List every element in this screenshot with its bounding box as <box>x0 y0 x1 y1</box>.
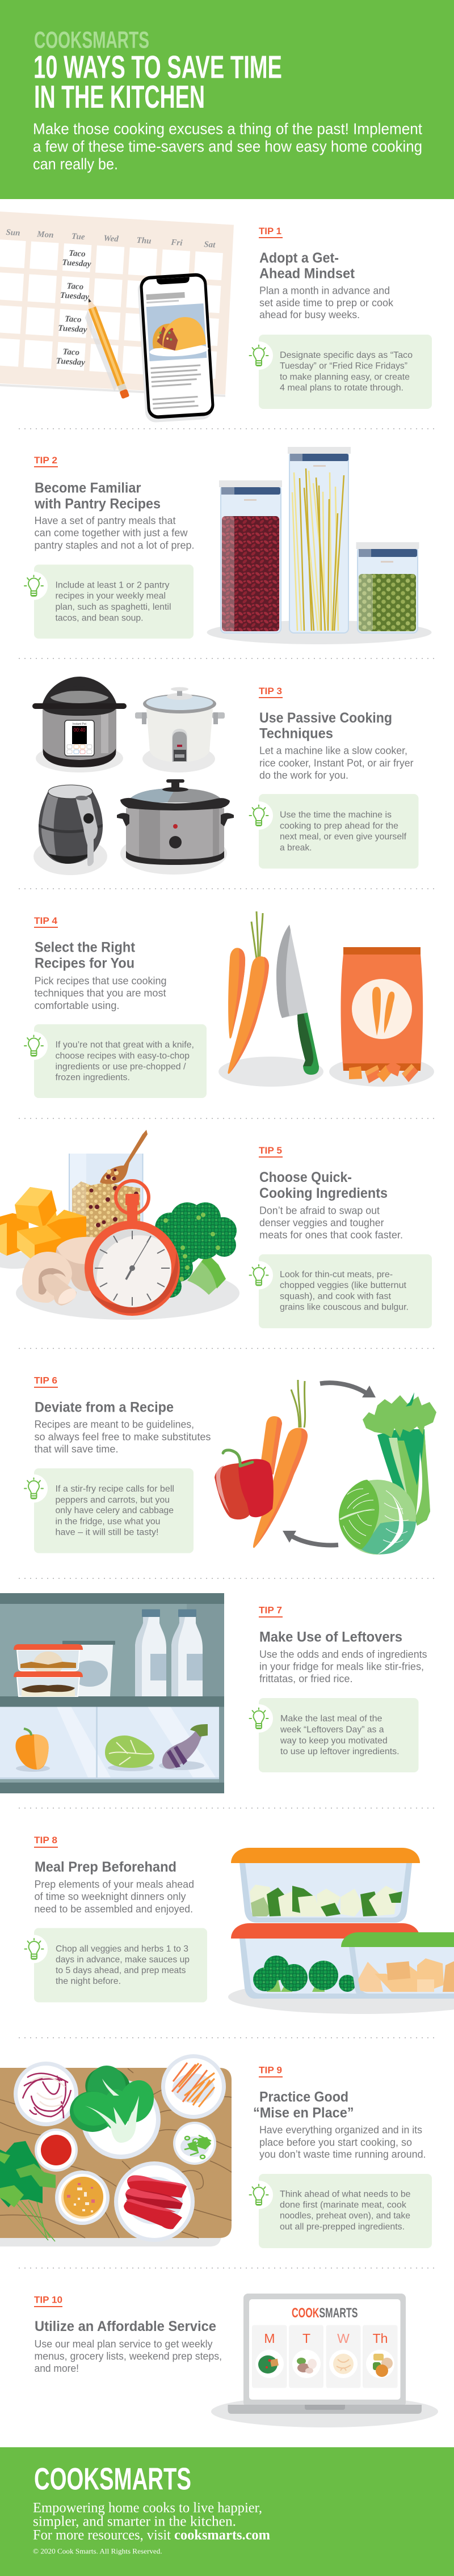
callout: recipes in your weekly meal <box>56 592 166 601</box>
illustration: calendar: Taco <box>65 314 82 324</box>
illustration: frozen carrot bag <box>329 947 434 1087</box>
body text: Don’t be afraid to swap out <box>259 1205 380 1216</box>
heading: Adopt a Get- <box>259 250 339 266</box>
jar behind <box>62 1641 115 1696</box>
heading <box>259 1169 388 1201</box>
heading: Recipes for You <box>35 956 134 972</box>
illustration: calendar: Tuesday <box>56 357 86 368</box>
callout: cooking to prep ahead for the <box>280 821 398 831</box>
tip label: TIP 6 <box>34 1375 57 1386</box>
container: broccoli <box>231 1923 420 1999</box>
callout <box>245 794 419 869</box>
body text <box>259 1205 403 1241</box>
icon: light bulb <box>24 1036 43 1056</box>
illustration: calendar: Fri <box>170 238 183 248</box>
glass of quinoa <box>69 1130 148 1248</box>
heading: Ahead Mindset <box>259 265 355 281</box>
cheese cubes <box>0 1187 86 1262</box>
intro text: can really be. <box>33 155 118 173</box>
jar of beans <box>219 480 282 633</box>
footer logo: COOKSMARTS <box>34 2461 191 2497</box>
heading: Become Familiar <box>35 480 141 496</box>
illustration: pencil <box>79 297 129 401</box>
illustration: calendar: Tuesday <box>62 258 91 269</box>
icon: light bulb <box>24 575 43 596</box>
panel: tip 4 <box>19 911 434 1098</box>
weekday columns: M <box>264 2331 275 2346</box>
callout: the night before. <box>56 1977 121 1986</box>
body text: menus, grocery lists, weekend prep steps, <box>34 2351 222 2362</box>
heading: Use Passive Cooking <box>259 710 392 726</box>
heading: Make Use of Leftovers <box>259 1629 402 1645</box>
body text <box>259 1649 427 1684</box>
panel: tip 6 <box>19 1375 436 1555</box>
icon: light bulb <box>250 2185 268 2205</box>
callout: Think ahead of what needs to be <box>280 2189 411 2199</box>
body text: Let a machine like a slow cooker, <box>259 745 407 757</box>
weekday columns: W <box>337 2331 350 2346</box>
illustration: phone with taco recipe <box>137 273 215 423</box>
container: tofu <box>341 1932 454 1999</box>
icon: light bulb <box>250 345 268 366</box>
heading <box>34 480 161 512</box>
plate: bok choy <box>70 2062 161 2159</box>
body text: do the work for you. <box>259 770 348 781</box>
panel: tip 3 <box>32 677 419 875</box>
tip label: TIP 8 <box>34 1835 57 1846</box>
illustration: calendar: Wed <box>103 234 119 244</box>
panel: tip 7 <box>0 1593 427 1793</box>
heading <box>259 250 355 281</box>
callout <box>19 1928 207 2002</box>
footer band <box>0 2447 454 2576</box>
body text: that will save time. <box>34 1443 118 1455</box>
body text: Plan a month in advance and <box>259 285 390 297</box>
callout: Make the last meal of the <box>280 1714 382 1724</box>
body text <box>259 2125 426 2160</box>
body text: rice cooker, Instant Pot, or air fryer <box>259 757 414 768</box>
plate: chili paste <box>35 2129 78 2172</box>
illustration: calendar: Taco <box>66 282 84 292</box>
weekday columns: Th <box>373 2331 388 2346</box>
heading: Cooking Ingredients <box>259 1185 388 1201</box>
body text <box>34 2338 222 2374</box>
illustration: calendar: Taco <box>62 347 79 357</box>
body text: Recipes are meant to be guidelines, <box>34 1419 194 1430</box>
callout <box>245 1255 432 1328</box>
callout: Chop all veggies and herbs 1 to 3 <box>56 1944 188 1954</box>
body text: set aside time to prep or cook <box>259 297 394 309</box>
callout: If a stir-fry recipe calls for bell <box>56 1484 174 1494</box>
orange pepper <box>15 1729 50 1772</box>
header band <box>0 0 454 199</box>
body text: and more! <box>34 2363 79 2374</box>
body text: Use the odds and ends of ingredients <box>259 1649 427 1660</box>
callout <box>19 1024 207 1098</box>
plate: red onion <box>14 2062 78 2126</box>
illustration: meal prep containers <box>228 1848 454 2014</box>
callout: done first (marinate meat, cook <box>280 2201 407 2210</box>
tip label: TIP 3 <box>259 686 282 696</box>
illustration: calendar: Tuesday <box>60 291 90 302</box>
heading: “Mise en Place” <box>253 2105 354 2121</box>
callout: Use the time the machine is <box>280 810 392 820</box>
tip label: TIP 7 <box>259 1605 282 1616</box>
broccoli <box>155 1202 237 1298</box>
illustration: calendar: Tue <box>71 232 85 242</box>
callout: squash), and cook with fast <box>280 1292 392 1302</box>
body text: Pick recipes that use cooking <box>34 975 167 987</box>
callout <box>19 565 194 639</box>
leftover boxes <box>14 1644 83 1696</box>
tip label: TIP 9 <box>259 2065 282 2076</box>
callout: Include at least 1 or 2 pantry <box>56 580 169 590</box>
container: cucumbers <box>231 1848 420 1923</box>
illustration: instant pot <box>32 677 127 772</box>
pepper <box>215 1450 274 1519</box>
callout <box>245 2174 432 2248</box>
illustration: calendar: Thu <box>136 236 152 246</box>
illustration: calendar <box>0 212 234 397</box>
footer text: simpler, and smarter in the kitchen. <box>33 2514 236 2529</box>
callout: only have celery and cabbage <box>56 1506 174 1515</box>
panel: tip 10 <box>34 2294 438 2427</box>
illustration: quick-cooking ingredients with stopwatch <box>0 1130 239 1320</box>
callout: days in advance, make sauces up <box>56 1955 190 1965</box>
logo on screen: COOKSMARTS <box>292 2305 358 2321</box>
arrow: to celery <box>320 1383 376 1397</box>
illustration: instant pot: 00:40 <box>74 727 85 733</box>
icon: light bulb <box>250 805 268 826</box>
illustration: pantry jars <box>207 447 431 644</box>
body text <box>259 285 394 320</box>
plate: peanut sauce <box>55 2170 110 2225</box>
plate: carrots <box>161 2054 226 2119</box>
heading: Deviate from a Recipe <box>35 1399 174 1415</box>
callout: noodles, preheat oven), and take <box>280 2211 410 2221</box>
title: IN THE KITCHEN <box>34 79 205 115</box>
body text: Have everything organized and in its <box>259 2125 422 2136</box>
body text: meats for ones that cook faster. <box>259 1230 403 1241</box>
illustration: air fryer <box>33 785 107 875</box>
footer text <box>33 2500 270 2543</box>
callout: peppers and carrots, but you <box>56 1495 170 1505</box>
body text: need to be assembled and enjoyed. <box>34 1903 193 1915</box>
callout: have – it will still be tasty! <box>56 1528 159 1537</box>
callout: 4 meal plans to rotate through. <box>280 383 403 392</box>
callout: out all pre-prepped ingredients. <box>280 2222 405 2232</box>
heading: with Pantry Recipes <box>34 496 161 512</box>
eggplant <box>159 1724 208 1770</box>
body text <box>34 1878 194 1915</box>
heading <box>35 939 136 972</box>
tip label: TIP 4 <box>34 915 58 926</box>
callout: tacos, and bean soup. <box>56 613 143 623</box>
body text <box>259 745 414 781</box>
callout: a break. <box>280 843 312 853</box>
callout: grains like couscous and bulgur. <box>280 1303 409 1312</box>
callout: Tuesday” or “Fried Rice Fridays” <box>280 361 407 371</box>
illustration: laptop with meal plan <box>211 2294 438 2427</box>
jar of peas <box>356 542 419 633</box>
arrow: to carrots <box>283 1531 338 1545</box>
tip label: TIP 2 <box>34 455 57 466</box>
icon: light bulb <box>250 1708 268 1729</box>
heading <box>253 2089 354 2121</box>
weekday columns: T <box>302 2331 310 2346</box>
icon: light bulb <box>24 1478 43 1498</box>
callout: way to keep you motivated <box>280 1736 388 1746</box>
callout: Designate specific days as “Taco <box>280 350 413 360</box>
panel: tip 8 <box>19 1835 454 2014</box>
intro text: Make those cooking excuses a thing of the past! Implement <box>33 120 422 137</box>
callout: plan, such as spaghetti, lentil <box>56 602 171 612</box>
cabbage <box>339 1480 416 1555</box>
illustration: rice cooker <box>135 687 225 772</box>
title: 10 WAYS TO SAVE TIME <box>33 49 282 86</box>
body text: denser veggies and tougher <box>259 1217 384 1228</box>
heading: Meal Prep Beforehand <box>35 1859 176 1875</box>
body text <box>34 975 167 1011</box>
heading: Choose Quick- <box>259 1169 352 1185</box>
title <box>33 49 282 115</box>
callout: frozen ingredients. <box>56 1072 130 1082</box>
body text <box>34 1419 211 1455</box>
body text: you don’t waste time running around. <box>259 2149 426 2160</box>
plate: scallions <box>173 2122 216 2165</box>
weekday columns <box>252 2325 397 2388</box>
heading: Utilize an Affordable Service <box>35 2319 216 2334</box>
illustration: pepper and carrots <box>215 1380 308 1548</box>
callout: week “Leftovers Day” as a <box>280 1725 384 1734</box>
body text <box>34 515 194 551</box>
heading: Select the Right <box>35 939 136 955</box>
callout: to make planning easy, or create <box>280 372 410 382</box>
illustration: cutting board with prepped ingredients <box>0 2054 232 2246</box>
milk bottles <box>135 1610 203 1696</box>
callout: Look for thin-cut meats, pre- <box>280 1270 393 1279</box>
body text: of time so weeknight dinners only <box>34 1891 186 1902</box>
callout: ingredients or use pre-chopped / <box>56 1062 186 1072</box>
body text: Prep elements of your meals ahead <box>34 1878 194 1890</box>
icon: light bulb <box>25 1939 43 1959</box>
body text: so always feel free to make substitutes <box>34 1431 211 1442</box>
body text: techniques that you are most <box>34 987 166 999</box>
napa cabbage <box>105 1735 154 1771</box>
copyright: © 2020 Cook Smarts. All Rights Reserved. <box>33 2547 162 2556</box>
stopwatch <box>85 1181 180 1316</box>
heading: Techniques <box>259 725 333 741</box>
heading <box>259 710 392 741</box>
callout: chopped veggies (like butternut <box>280 1281 407 1290</box>
body text: frittatas, or fried rice. <box>259 1673 353 1684</box>
illustration: calendar: Taco <box>69 249 86 259</box>
callout: to 5 days ahead, and prep meats <box>56 1966 186 1975</box>
callout <box>19 1468 194 1553</box>
logo: Cook Smarts: COOKSMARTS <box>34 26 149 53</box>
jar of spaghetti <box>288 447 351 633</box>
illustration: carrots and knife <box>218 911 323 1087</box>
tip label: TIP 5 <box>259 1145 282 1156</box>
panel: tip 5 <box>0 1130 432 1328</box>
icon: light bulb <box>250 1265 268 1285</box>
panel: tip 9 <box>0 2054 432 2248</box>
body text: can come together with just a few <box>34 527 188 539</box>
knife <box>276 924 319 1075</box>
illustration: calendar: Sat <box>204 240 216 250</box>
illustration: calendar: Tuesday <box>58 324 87 335</box>
illustration: instant pot: Instant Pot <box>73 723 87 726</box>
intro text: a few of these time-savers and see how easy home cooking <box>33 138 422 155</box>
callout: to use up leftover ingredients. <box>280 1747 400 1756</box>
illustration: slow cooker <box>117 779 234 875</box>
cilantro <box>0 2141 56 2241</box>
body text: pantry staples and not a lot of prep. <box>34 539 194 551</box>
tip label: TIP 10 <box>34 2295 62 2305</box>
plate: steak <box>114 2161 195 2242</box>
footer text: For more resources, visit cooksmarts.com <box>33 2527 270 2543</box>
heading: Practice Good <box>259 2089 348 2105</box>
mushrooms <box>22 1237 96 1306</box>
footer text: Empowering home cooks to live happier, <box>33 2500 262 2515</box>
callout <box>245 1698 419 1772</box>
intro text <box>33 120 422 173</box>
body text: comfortable using. <box>34 1000 119 1011</box>
callout <box>245 335 432 409</box>
panel: tip 2 <box>19 447 431 644</box>
illustration: calendar: Sun <box>6 228 20 238</box>
body text: ahead for busy weeks. <box>259 309 360 320</box>
body text: Use our meal plan service to get weekly <box>34 2338 212 2350</box>
illustration: calendar: Mon <box>36 230 54 240</box>
illustration: fridge <box>0 1593 224 1793</box>
tip label: TIP 1 <box>259 226 281 237</box>
body text: place before you start cooking, so <box>259 2137 412 2148</box>
callout: choose recipes with easy-to-chop <box>56 1051 190 1061</box>
illustration: celery and cabbage <box>339 1392 436 1555</box>
body text: Have a set of pantry meals that <box>34 515 176 526</box>
panel: tip 1 <box>0 212 432 423</box>
body text: in your fridge for meals like stir-fries, <box>259 1661 424 1672</box>
callout: next meal, or even give yourself <box>280 832 407 842</box>
callout: If you’re not that great with a knife, <box>56 1040 194 1050</box>
callout: in the fridge, use what you <box>56 1517 160 1527</box>
